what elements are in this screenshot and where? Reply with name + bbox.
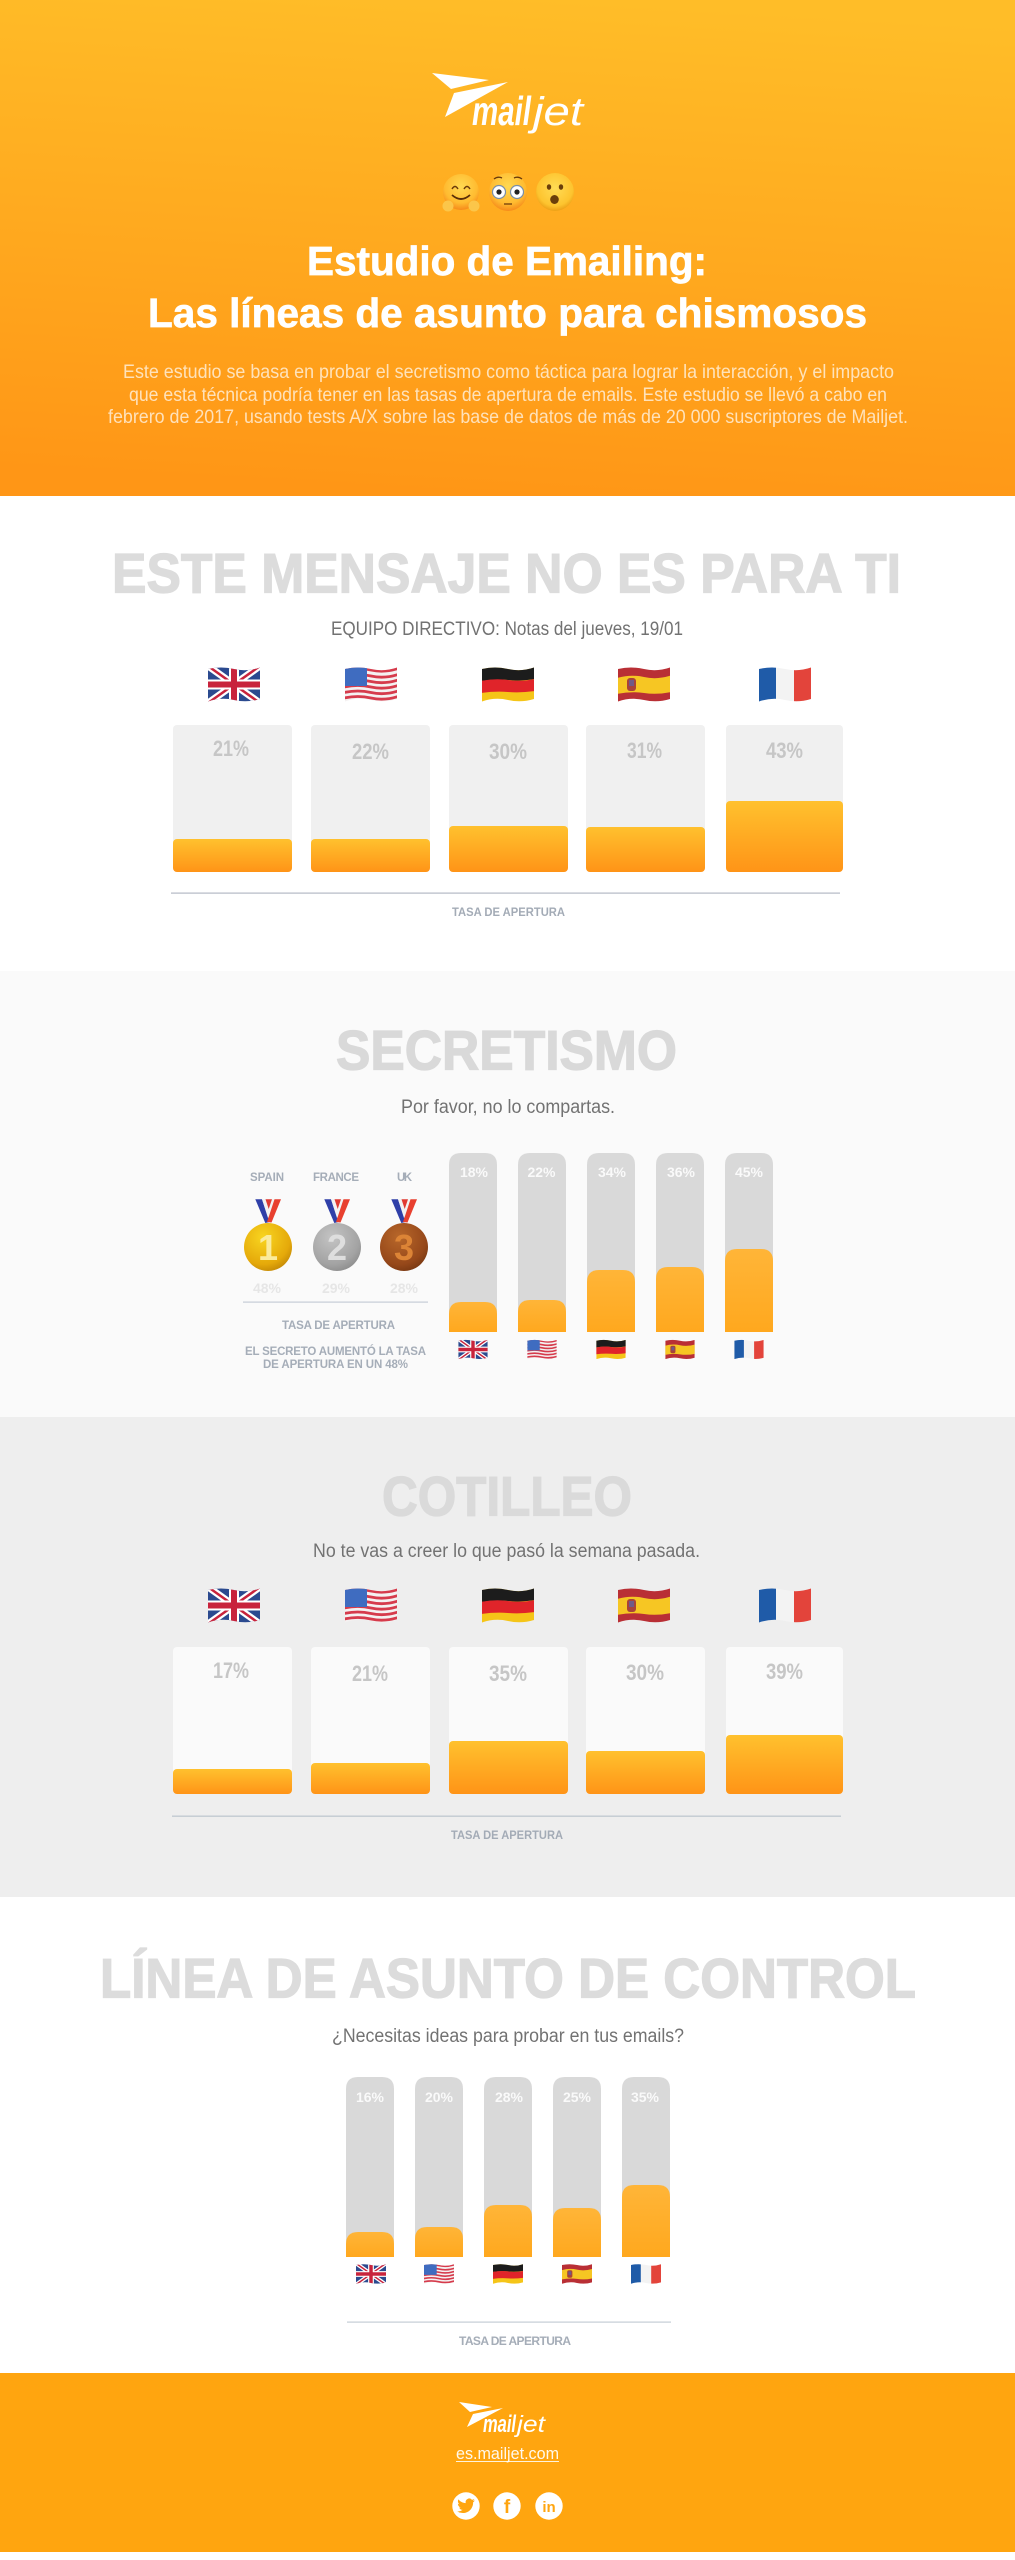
logo: Mailjet <box>432 73 585 134</box>
title: Estudio de Emailing: <box>307 238 707 284</box>
flags row <box>458 1339 764 1360</box>
logo: Mailjet: mail <box>472 88 532 134</box>
bar chart: open rate: 31% <box>627 738 662 763</box>
medals ranking: FRANCE <box>313 1172 359 1184</box>
bar chart: open rate by country: 20% <box>425 2089 454 2105</box>
icon: linkedin: in <box>542 2499 556 2516</box>
bar chart: open rate by country <box>449 1153 773 1332</box>
axis label: TASA DE APERTURA <box>451 1828 563 1842</box>
bar chart: open rate by country: 18% <box>460 1164 489 1180</box>
icon: hushed face emoji <box>536 173 574 211</box>
medals ranking: 29% <box>322 1280 351 1296</box>
intro text: que esta técnica podría tener en las tasas de apertura de emails. Este estudio se llevó a cabo en <box>129 384 887 406</box>
intro text <box>108 361 908 428</box>
subtitle: ¿Necesitas ideas para probar en tus emails? <box>332 2026 684 2047</box>
intro text: febrero de 2017, usando tests A/X sobre las base de datos de más de 20 000 suscriptores de Mailjet. <box>108 406 908 428</box>
icon: silver medal <box>313 1199 361 1271</box>
bar chart: open rate by country: 25% <box>563 2089 592 2105</box>
bar chart: open rate: 21% <box>352 1661 388 1686</box>
panel: este mensaje no es para ti <box>0 496 1015 971</box>
heading: COTILLEO <box>382 1464 632 1528</box>
subtitle: Por favor, no lo compartas. <box>401 1097 615 1118</box>
icon: facebook: f <box>504 2497 511 2518</box>
logo: Mailjet <box>459 2402 547 2438</box>
medals ranking: TASA DE APERTURA <box>282 1320 395 1332</box>
icon: hugging face emoji <box>442 174 480 212</box>
medals ranking: 48% <box>253 1280 282 1296</box>
bar chart: open rate: 30% <box>489 739 527 764</box>
icon: linkedin <box>535 2492 563 2520</box>
heading: SECRETISMO <box>336 1018 677 1082</box>
medals ranking <box>243 1172 428 1371</box>
icon: bronze medal <box>380 1199 428 1271</box>
icon: silver medal: 2 <box>327 1227 347 1268</box>
bar chart: open rate <box>173 1647 843 1794</box>
flags row <box>208 666 811 703</box>
title: Las líneas de asunto para chismosos <box>148 290 867 336</box>
bar chart: open rate by country: 34% <box>598 1164 627 1180</box>
medals ranking: DE APERTURA EN UN 48% <box>263 1359 408 1371</box>
bar chart: open rate by country <box>346 2077 670 2257</box>
title <box>148 238 867 336</box>
panel: header <box>0 0 1015 496</box>
logo: Mailjet: jet <box>527 90 585 134</box>
bar chart: open rate: 30% <box>626 1660 664 1685</box>
intro text: Este estudio se basa en probar el secretismo como táctica para lograr la interacción, y el impacto <box>123 361 894 383</box>
bar chart: open rate by country: 45% <box>735 1164 764 1180</box>
heading: ESTE MENSAJE NO ES PARA TI <box>112 542 901 604</box>
bar chart: open rate: 21% <box>213 736 249 761</box>
bar chart: open rate by country: 35% <box>631 2089 660 2105</box>
bar chart: open rate by country: 22% <box>527 1164 556 1180</box>
icon: bronze medal: 3 <box>394 1227 414 1268</box>
bar chart: open rate by country: 28% <box>495 2089 524 2105</box>
logo: Mailjet: mail <box>483 2411 517 2438</box>
axis label: TASA DE APERTURA <box>459 2334 571 2348</box>
bar chart: open rate <box>173 725 843 872</box>
panel: secretismo <box>0 971 1015 1417</box>
bar chart: open rate: 22% <box>352 739 389 764</box>
medals ranking: SPAIN <box>250 1172 284 1184</box>
medals ranking: UK <box>397 1172 413 1184</box>
panel: cotilleo <box>0 1417 1015 1897</box>
bar chart: open rate: 17% <box>213 1658 249 1683</box>
panel: linea de asunto de control <box>0 1897 1015 2373</box>
icon: twitter <box>452 2492 480 2520</box>
bar chart: open rate by country: 16% <box>356 2089 385 2105</box>
icon: gold medal <box>244 1199 292 1271</box>
bar chart: open rate by country: 36% <box>667 1164 696 1180</box>
bar chart: open rate: 35% <box>489 1661 527 1686</box>
bar chart: open rate: 43% <box>766 738 803 763</box>
heading: LÍNEA DE ASUNTO DE CONTROL <box>100 1946 916 2010</box>
logo: Mailjet: jet <box>514 2411 547 2437</box>
medals ranking: 28% <box>390 1280 419 1296</box>
flags row <box>208 1587 811 1624</box>
medals ranking: EL SECRETO AUMENTÓ LA TASA <box>245 1345 426 1358</box>
axis label: TASA DE APERTURA <box>452 905 565 919</box>
icon: flushed face emoji <box>489 173 527 211</box>
flags row <box>356 2263 661 2285</box>
subtitle: EQUIPO DIRECTIVO: Notas del jueves, 19/01 <box>331 619 683 640</box>
bar chart: open rate: 39% <box>766 1659 803 1684</box>
subtitle: No te vas a creer lo que pasó la semana pasada. <box>313 1541 700 1562</box>
website link: es.mailjet.com <box>456 2445 559 2463</box>
icon: facebook <box>493 2492 521 2520</box>
panel: footer <box>0 2373 1015 2552</box>
icon: gold medal: 1 <box>258 1227 278 1268</box>
